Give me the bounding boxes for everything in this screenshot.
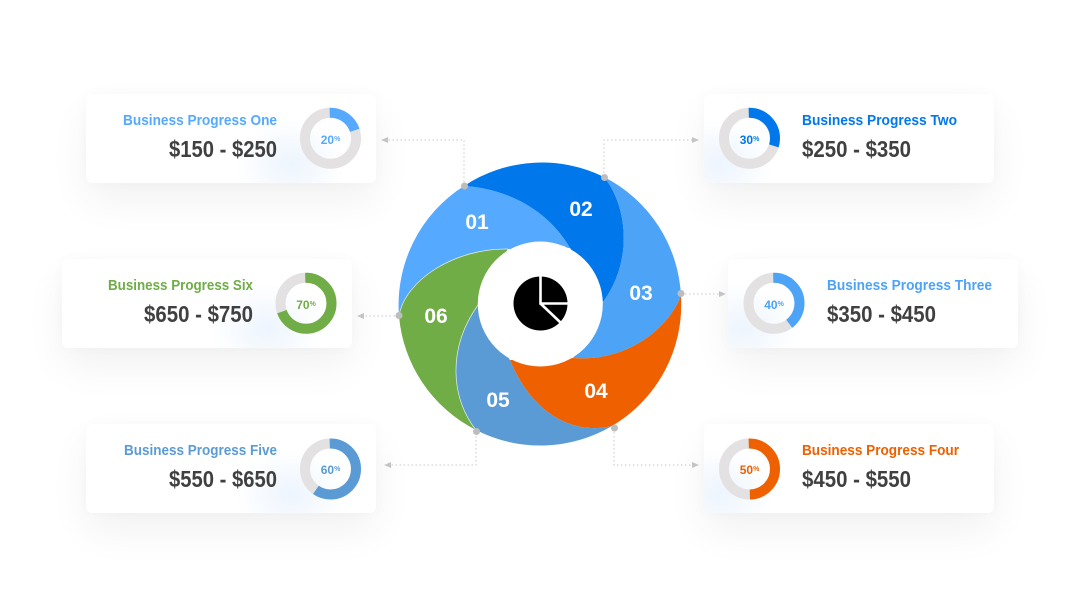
donut chart 70%: 70 (296, 298, 310, 312)
value: $550 - $650 (169, 466, 277, 492)
donut chart 20% (305, 113, 356, 164)
heading: Business Progress Four (802, 442, 959, 459)
panel: Business Progress Four content (724, 442, 959, 494)
donut chart 30%: % (753, 136, 760, 143)
segment numbers: 01 (465, 211, 489, 234)
donut chart 30% (724, 113, 775, 164)
donut chart 50%: % (753, 466, 760, 473)
donut chart 50%: 50 (740, 463, 753, 477)
segment 02 (464, 163, 624, 302)
icon: pie chart (514, 276, 569, 330)
donut chart 20%: 20 (321, 133, 334, 147)
segment numbers (424, 198, 653, 412)
panel: Business Progress Two content (724, 112, 957, 164)
segment numbers: 03 (629, 282, 653, 305)
segment numbers: 04 (584, 380, 608, 403)
segment 06 (399, 249, 508, 430)
donut chart 60% (305, 444, 356, 494)
connector: segment 06 to card six (357, 313, 399, 319)
donut chart 60%: % (334, 466, 341, 473)
white centre circle (478, 242, 603, 366)
heading: Business Progress One (123, 112, 277, 129)
segment 05 (456, 305, 612, 446)
connector: segment 01 to card one (381, 137, 464, 186)
donut chart 60%: 60 (321, 463, 334, 477)
connector: segment 02 to card two (604, 137, 699, 177)
segment edge highlights (399, 249, 508, 430)
panel: Business Progress Six content (108, 277, 332, 329)
segment numbers: 05 (486, 389, 510, 412)
donut chart 40% (748, 278, 800, 329)
donut chart 40%: % (778, 301, 785, 308)
segment 03 (573, 177, 681, 358)
segment 04 (510, 296, 681, 428)
card: Business Progress Four background (704, 424, 994, 513)
heading: Business Progress Five (124, 442, 277, 459)
donut chart 50% (724, 444, 775, 494)
segment numbers: 02 (569, 198, 593, 221)
panel: Business Progress One content (123, 112, 356, 164)
heading: Business Progress Two (802, 112, 957, 129)
value: $250 - $350 (802, 136, 911, 162)
segment numbers: 06 (424, 305, 448, 328)
segment 01 (399, 186, 570, 316)
connector: segment 05 to card five (384, 432, 476, 468)
heading: Business Progress Six (108, 277, 254, 294)
donut chart 40%: 40 (764, 298, 778, 312)
donut chart 20%: % (334, 136, 341, 143)
value: $450 - $550 (802, 466, 911, 492)
anchor dots (396, 174, 684, 435)
centre hole fill (478, 248, 603, 360)
donut chart 30%: 30 (740, 133, 753, 147)
card: Business Progress Five background (86, 424, 376, 513)
swirl wheel (396, 163, 684, 446)
value: $650 - $750 (144, 301, 253, 327)
card: Business Progress Six background (62, 259, 352, 348)
value: $150 - $250 (169, 136, 277, 162)
card: Business Progress One background (86, 94, 376, 183)
connector: segment 03 to card three (681, 291, 726, 297)
donut chart 70% (280, 278, 332, 329)
panel: Business Progress Five content (124, 442, 356, 494)
donut chart 70%: % (310, 301, 317, 308)
heading: Business Progress Three (827, 277, 992, 294)
card: Business Progress Two background (704, 94, 994, 183)
connector: segment 04 to card four (614, 428, 699, 468)
card: Business Progress Three background (728, 259, 1018, 348)
panel: Business Progress Three content (748, 277, 992, 329)
value: $350 - $450 (827, 301, 936, 327)
